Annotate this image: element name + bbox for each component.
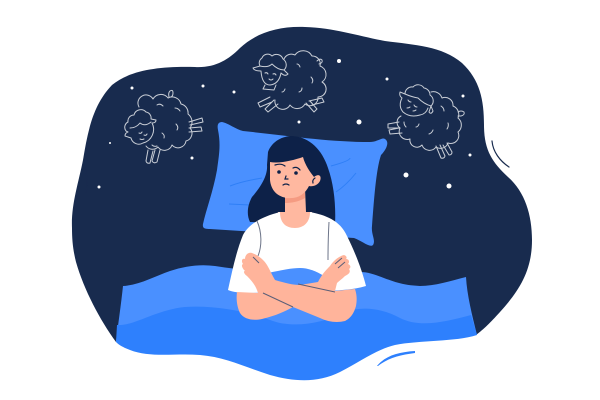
left motion arc	[84, 165, 87, 192]
shirt creases	[257, 221, 329, 260]
neck shadow	[285, 191, 305, 203]
eyebrows and eyes	[275, 164, 315, 185]
background night blob	[72, 27, 532, 342]
arm and finger lines	[253, 257, 345, 307]
crossed arms	[237, 253, 357, 322]
pillow	[203, 122, 387, 246]
shirt	[228, 212, 366, 293]
right motion arc	[492, 141, 509, 167]
blanket lower fold	[116, 307, 477, 380]
hair	[248, 136, 335, 225]
blanket tucked between arms	[268, 268, 324, 292]
stars	[98, 59, 472, 188]
sheep: left	[125, 90, 203, 163]
pillow creases	[229, 158, 356, 205]
blanket	[116, 265, 477, 342]
face	[270, 157, 321, 198]
sheep: right	[388, 85, 464, 158]
sheep: top	[253, 51, 326, 112]
bottom motion arc	[377, 351, 415, 366]
face skin	[270, 157, 321, 198]
neck	[278, 188, 312, 230]
